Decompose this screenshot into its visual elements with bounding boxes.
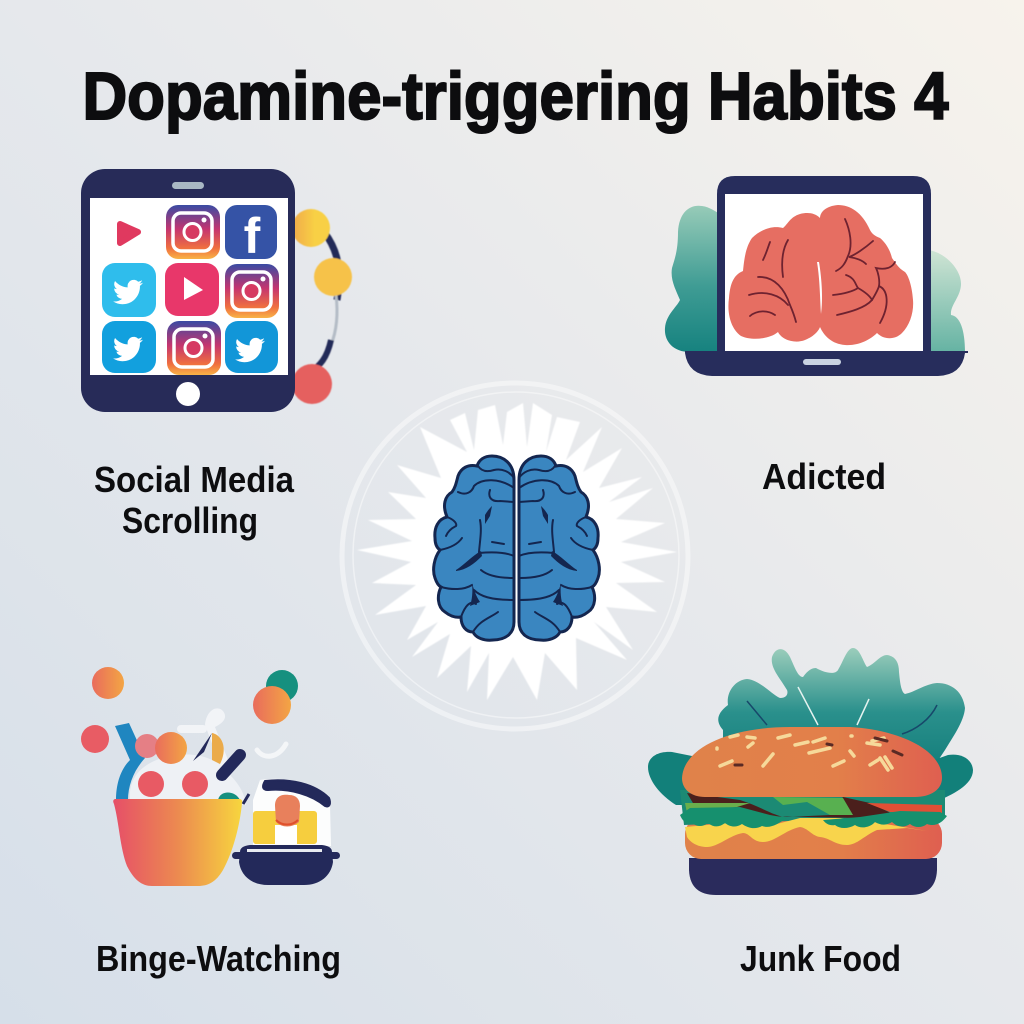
panel: addicted (665, 176, 968, 497)
panel: binge-watching (81, 667, 341, 979)
icon: instagram top (166, 205, 220, 259)
icon: laptop (685, 176, 968, 376)
icon: navy base (689, 858, 937, 895)
icon: gradient bowl (113, 799, 242, 886)
panel: junk food (648, 648, 973, 979)
icon: cooking pot (232, 779, 340, 885)
icon: teal foliage behind laptop (665, 206, 965, 352)
icon: facebook (225, 205, 277, 264)
icon: facebook: f (244, 208, 261, 264)
icon: floating food circles (81, 667, 298, 753)
icon: twitter bottom left (102, 321, 156, 373)
panel: social media scrolling (81, 169, 352, 541)
icon: play badge (120, 224, 138, 243)
icon: pale kitchen utensils (115, 708, 286, 805)
icon: bottom bun (685, 818, 942, 859)
label: junk food: Junk Food (740, 938, 901, 979)
icon: tablet (81, 169, 295, 412)
title: Dopamine-triggering Habits 4 (82, 59, 948, 134)
icon: white sunburst (357, 403, 677, 700)
icon: top bun with seeds (682, 727, 942, 797)
label: social media scrolling (94, 459, 295, 541)
icon: red brain (728, 205, 913, 345)
icon: instagram right (225, 264, 279, 318)
label: adicted: Adicted (762, 456, 886, 497)
icon: halo rings (342, 383, 688, 729)
icon: youtube play (165, 263, 219, 316)
icon: twitter light (102, 263, 156, 317)
icon: beaded arc beside tablet (292, 209, 352, 404)
icon: twitter bottom right (225, 321, 278, 373)
panel: central brain (342, 383, 688, 729)
label: binge-watching: Binge-Watching (96, 938, 341, 979)
label: social media scrolling: Social Media (94, 459, 295, 500)
icon: blue brain (434, 456, 599, 640)
icon: burger fillings (680, 790, 947, 847)
icon: instagram bottom (167, 321, 221, 375)
icon: lettuce backdrop (648, 648, 973, 805)
label: social media scrolling: Scrolling (122, 500, 258, 541)
